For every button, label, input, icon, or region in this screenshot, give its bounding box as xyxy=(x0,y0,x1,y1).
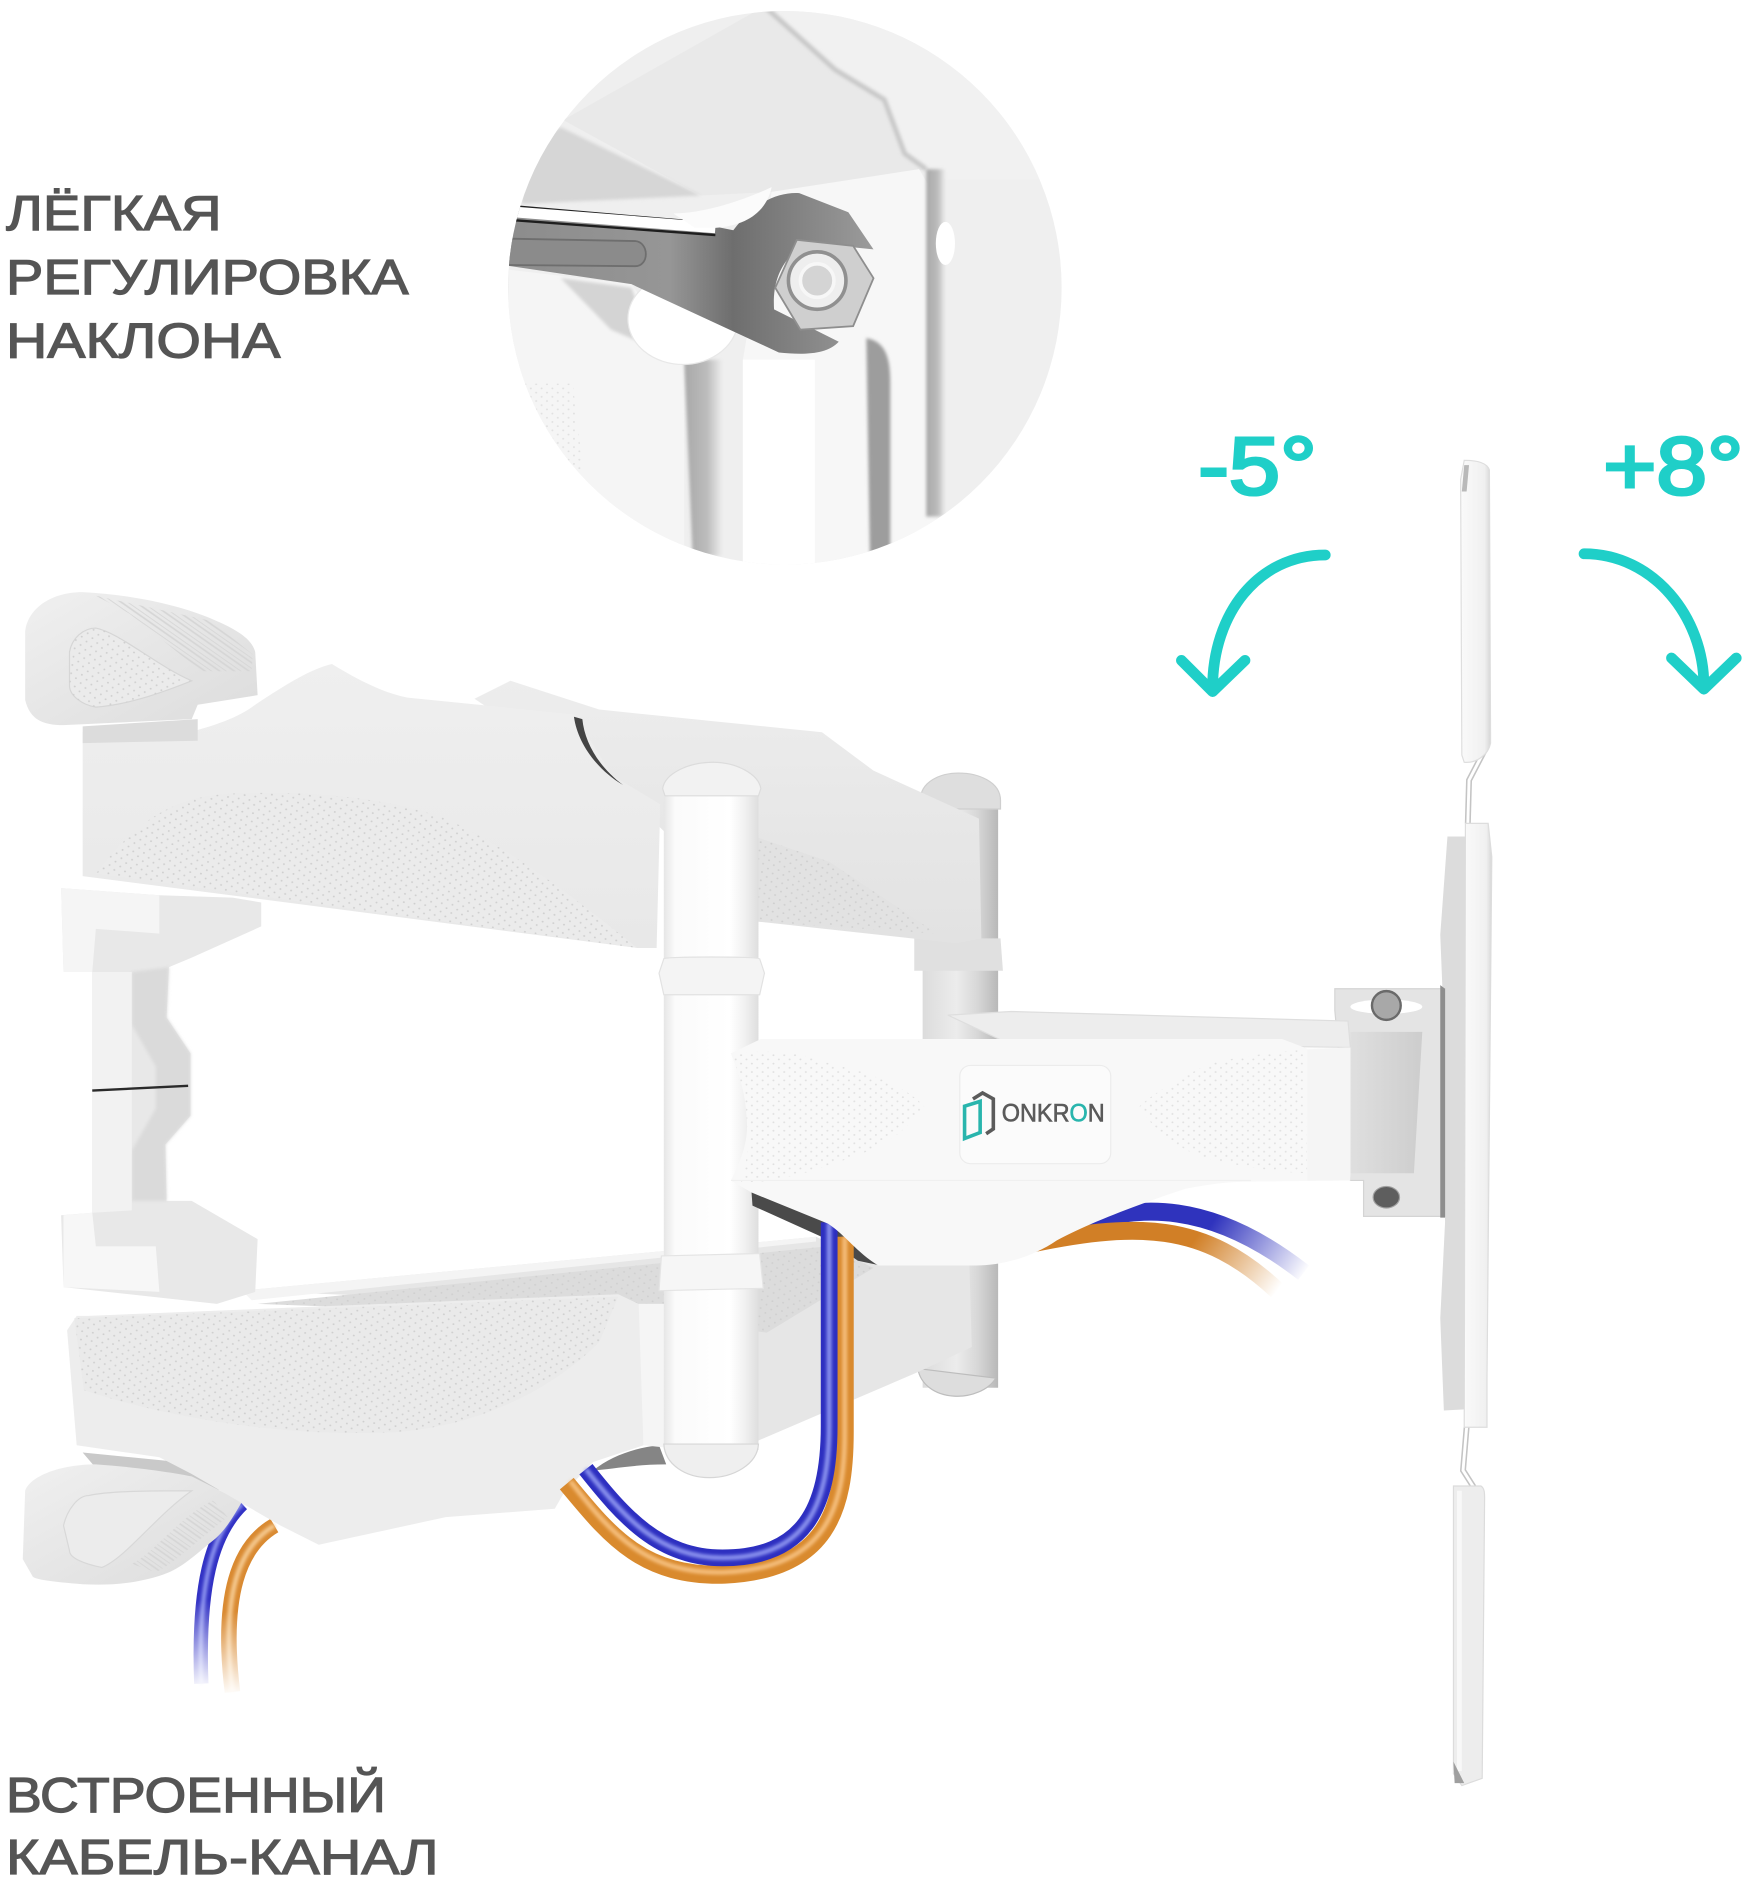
inset: hex nut and bolt xyxy=(775,240,874,330)
logo wordmark: ONKRON xyxy=(1002,1100,1105,1128)
lower arm: front section xyxy=(67,1294,666,1545)
inset: side hole xyxy=(936,222,955,265)
wall plate xyxy=(1440,460,1492,1786)
top arm: rear section xyxy=(474,681,981,943)
heading: built-in cable channel: ВСТРОЕННЫЙ xyxy=(6,1766,386,1823)
left swivel link xyxy=(61,888,261,1304)
lower arm: rear section xyxy=(242,1237,972,1470)
lower adjustment knob xyxy=(23,1452,242,1585)
heading: easy tilt adjustment: НАКЛОНА xyxy=(6,314,281,368)
inset: tilt bracket plate xyxy=(777,169,922,192)
heading: easy tilt adjustment: РЕГУЛИРОВКА xyxy=(6,251,409,305)
logo plate xyxy=(960,1065,1111,1164)
logo icon xyxy=(965,1093,993,1139)
cable: centre loop xyxy=(567,1222,845,1575)
arm top plate behind main arm xyxy=(948,1011,1350,1047)
swivel bracket at wall plate xyxy=(1335,985,1445,1218)
tilt range: minus five degrees: -5° xyxy=(1198,421,1317,512)
back vertical pole xyxy=(914,773,1003,1396)
heading: easy tilt adjustment: ЛЁГКАЯ xyxy=(6,187,222,241)
main arm cover xyxy=(731,1039,1350,1266)
inset: shaded vertical strips xyxy=(684,169,945,556)
tilt range: plus eight degrees xyxy=(1584,421,1743,689)
inset: wrench xyxy=(503,187,874,354)
heading: built-in cable channel: КАБЕЛЬ-КАНАЛ xyxy=(6,1831,439,1884)
tilt range: minus five degrees xyxy=(1181,421,1325,692)
heading: easy tilt adjustment xyxy=(6,187,409,368)
dark recess under main arm xyxy=(751,1189,881,1266)
tilt range: plus eight degrees: +8° xyxy=(1603,421,1743,512)
cable: right exit xyxy=(1018,1212,1304,1291)
top adjustment knob xyxy=(25,592,258,743)
top arm: front section xyxy=(83,664,660,948)
circular inset: wrench on tilt bolt xyxy=(503,0,1066,575)
bracket: lower bolt xyxy=(1373,1186,1400,1208)
bracket: upper bolt xyxy=(1372,991,1401,1020)
front vertical pole xyxy=(659,762,764,1478)
inset: white spacer xyxy=(627,290,735,365)
cable: lower-left exit xyxy=(201,1504,274,1692)
heading: built-in cable channel xyxy=(6,1766,439,1884)
